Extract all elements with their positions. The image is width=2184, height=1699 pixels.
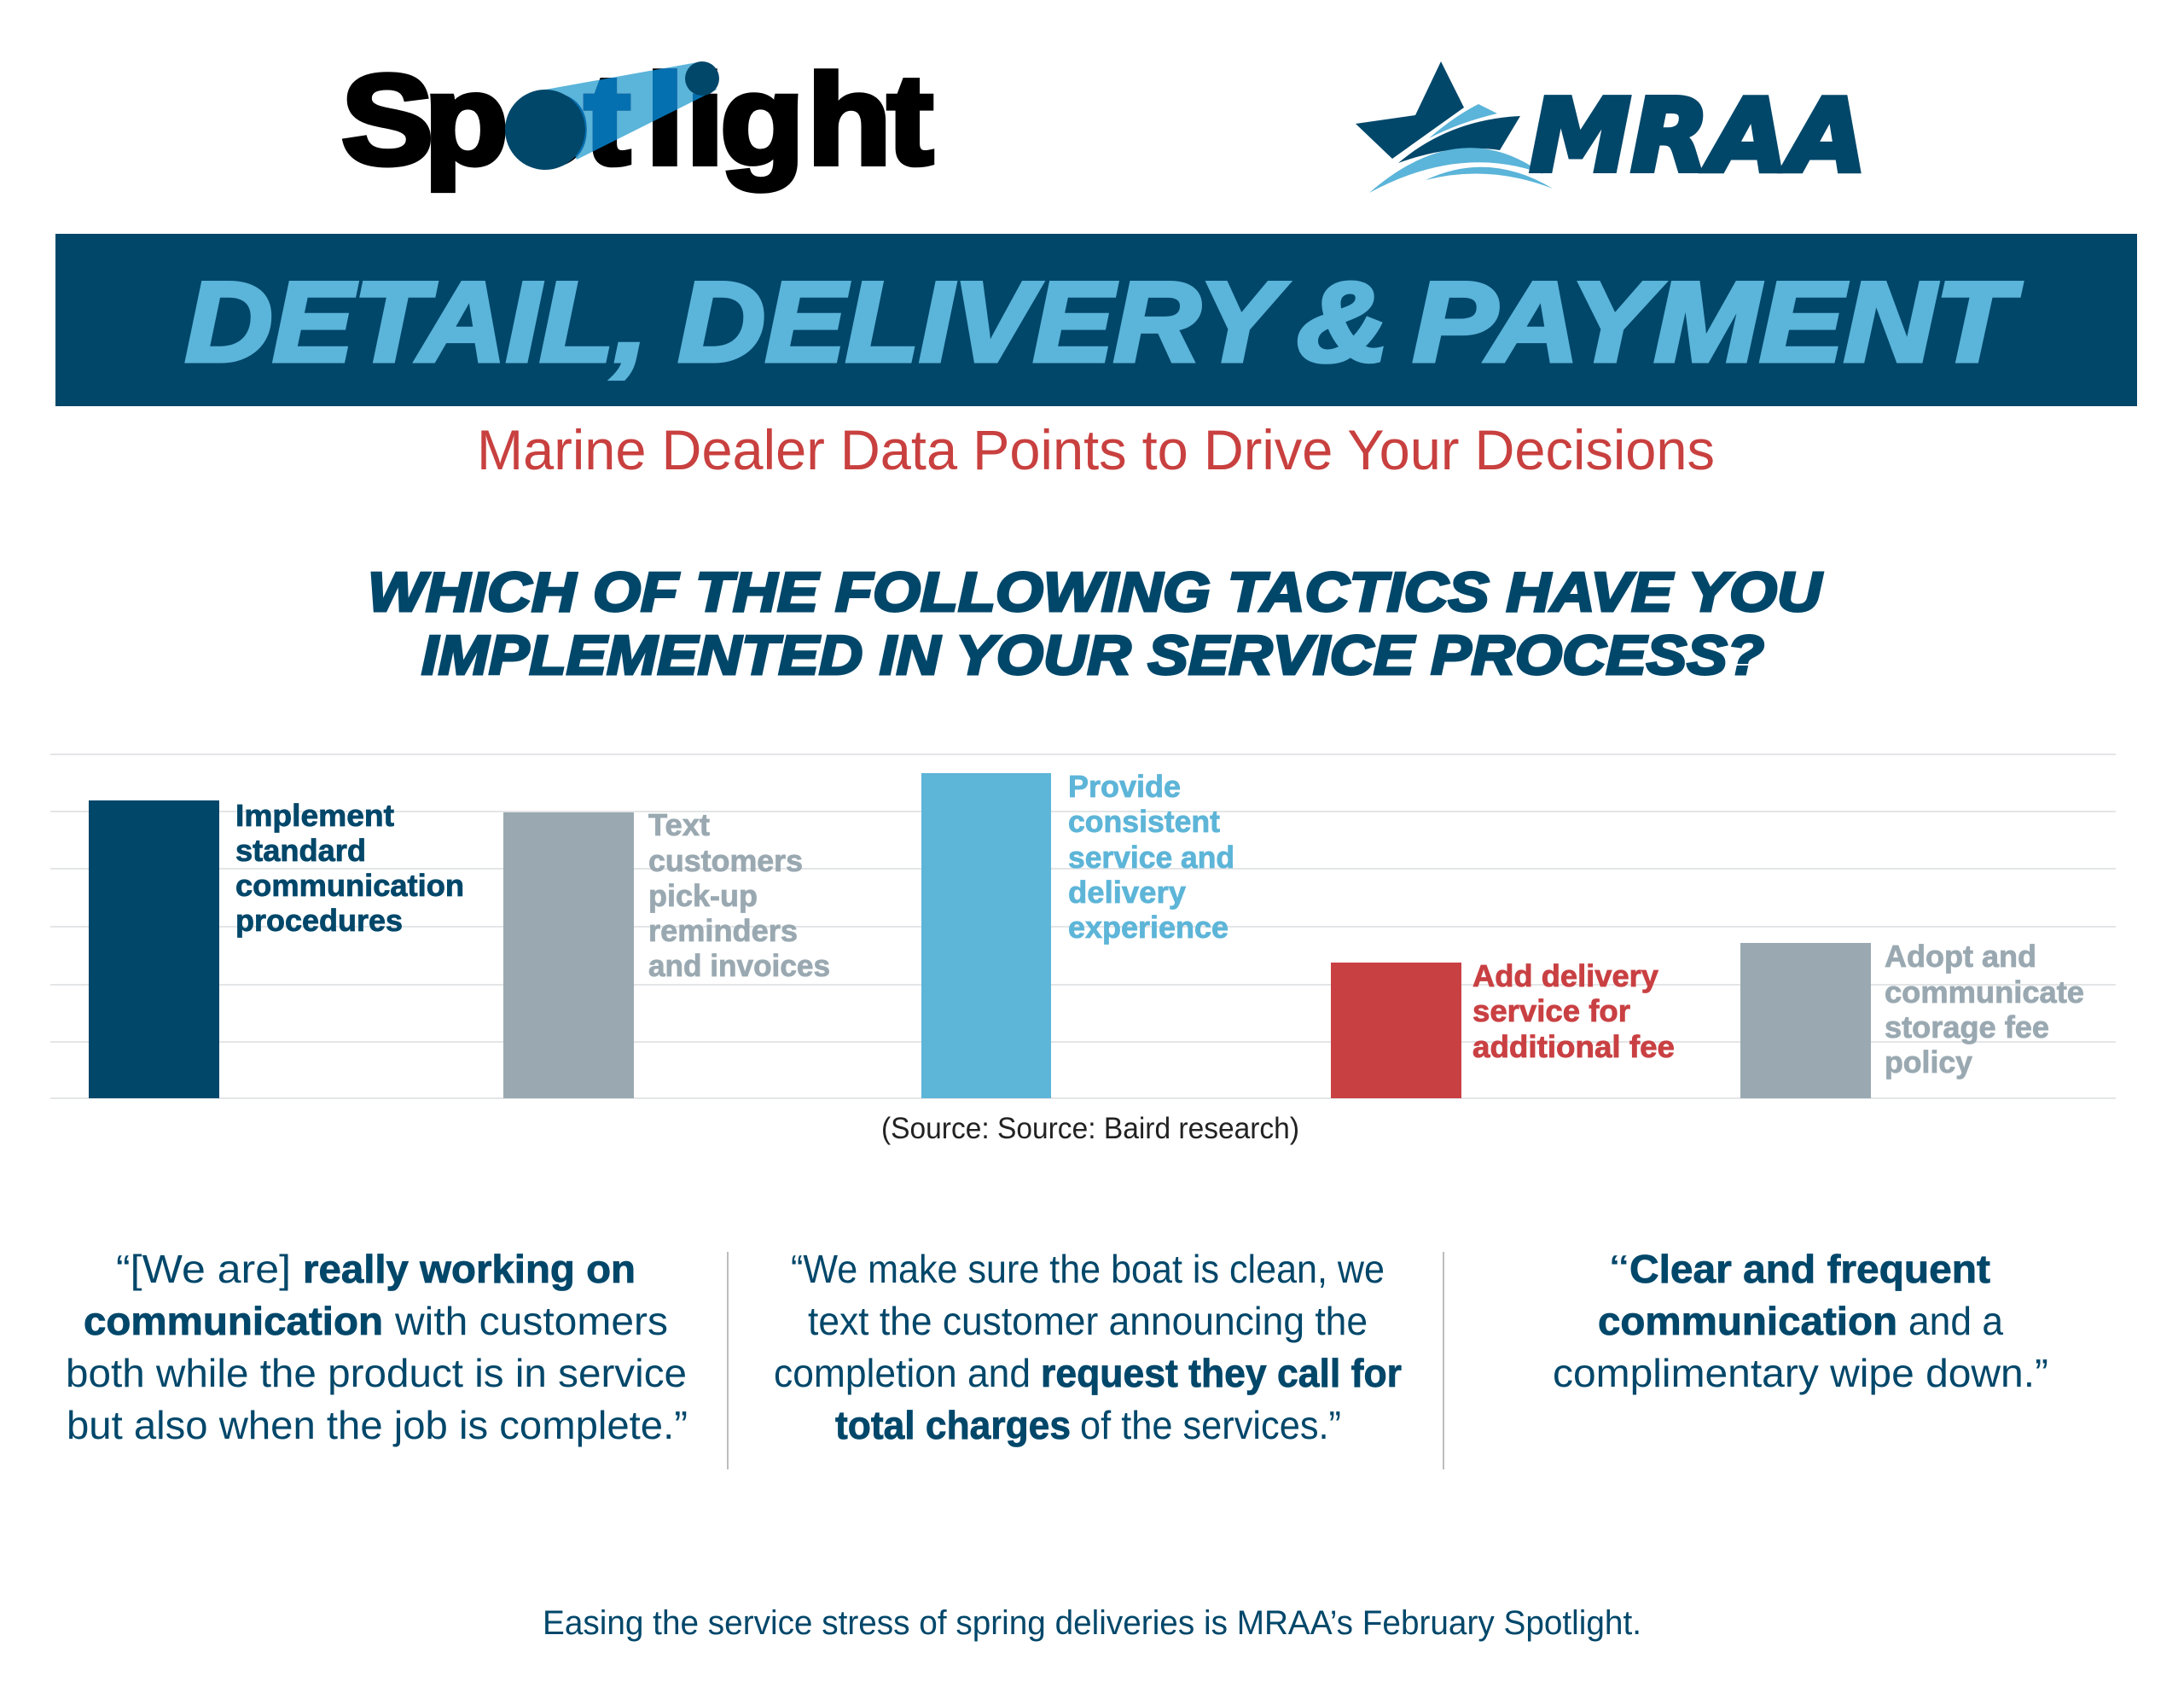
chart heading bbox=[368, 561, 1823, 686]
quote: left column: but also when the job is complete.” bbox=[67, 1403, 688, 1447]
label: delivery fee: additional fee bbox=[1472, 1029, 1675, 1064]
label: standard communication: procedures bbox=[235, 903, 403, 938]
quote: right column: and a bbox=[1908, 1299, 2003, 1343]
label: delivery fee: Add delivery bbox=[1472, 958, 1658, 993]
divider bbox=[727, 1252, 729, 1469]
quote: right column bbox=[1553, 1247, 2048, 1395]
label: consistent experience: Provide bbox=[1068, 769, 1181, 804]
label: standard communication bbox=[235, 798, 464, 938]
label: text customers bbox=[648, 807, 830, 983]
label: text customers: and invoices bbox=[648, 948, 830, 983]
logo: Spotlight: Spotlight bbox=[341, 49, 933, 192]
title banner: PAYMENT bbox=[1413, 259, 2022, 386]
title banner: & bbox=[1297, 259, 1389, 386]
quote: middle column: total charges bbox=[835, 1403, 1071, 1447]
title banner bbox=[55, 234, 2137, 406]
label: consistent experience: delivery bbox=[1068, 875, 1186, 910]
label: delivery fee bbox=[1472, 958, 1675, 1064]
quote: middle column bbox=[774, 1247, 1402, 1447]
logo: MRAA: MRAA bbox=[1530, 77, 1867, 195]
quote: left column: communication bbox=[84, 1299, 383, 1343]
quote: middle column: completion and bbox=[774, 1351, 1031, 1395]
bar chart bbox=[50, 754, 2116, 1098]
label: storage fee: Adopt and bbox=[1885, 939, 2036, 974]
label: storage fee: communicate bbox=[1885, 975, 2084, 1010]
label: standard communication: standard bbox=[235, 833, 366, 868]
bar: delivery fee bbox=[1331, 963, 1461, 1098]
chart heading: IMPLEMENTED IN YOUR SERVICE PROCESS? bbox=[421, 624, 1764, 686]
label: standard communication: communication bbox=[235, 868, 464, 903]
quote: right column: Clear and frequent bbox=[1629, 1247, 1990, 1291]
bar: text customers bbox=[503, 812, 634, 1098]
title banner: DELIVERY bbox=[678, 259, 1288, 386]
label: consistent experience: experience bbox=[1068, 910, 1228, 945]
title banner: DETAIL, bbox=[185, 259, 648, 386]
subtitle: Marine Dealer Data Points to Drive Your Decisions bbox=[477, 418, 1715, 481]
label: text customers: customers bbox=[648, 843, 803, 878]
bar: storage fee bbox=[1740, 943, 1871, 1098]
label: storage fee: policy bbox=[1885, 1044, 1972, 1079]
label: text customers: reminders bbox=[648, 913, 798, 948]
label: consistent experience bbox=[1068, 769, 1234, 945]
quote: middle column: text the customer announcing the bbox=[808, 1299, 1368, 1343]
quote: right column: complimentary wipe down.” bbox=[1553, 1351, 2048, 1395]
quote: left column bbox=[66, 1247, 688, 1447]
label: text customers: Text bbox=[648, 807, 710, 842]
quote: middle column: request they call for bbox=[1041, 1351, 1402, 1395]
label: consistent experience: consistent bbox=[1068, 804, 1220, 839]
quote: left column: both while the product is in service bbox=[66, 1351, 687, 1395]
label: storage fee: storage fee bbox=[1885, 1010, 2049, 1044]
quote: left column: with customers bbox=[394, 1299, 668, 1343]
bar: standard communication bbox=[89, 800, 219, 1098]
label: storage fee bbox=[1885, 939, 2084, 1079]
quote: middle column: “We make sure the boat is clean, we bbox=[791, 1247, 1385, 1291]
quote: right column: communication bbox=[1598, 1299, 1897, 1343]
source note: (Source: Source: Baird research) bbox=[881, 1112, 1299, 1145]
label: text customers: pick-up bbox=[648, 878, 758, 913]
label: standard communication: Implement bbox=[235, 798, 394, 833]
quote: left column: “[We are] bbox=[116, 1247, 291, 1291]
label: consistent experience: service and bbox=[1068, 840, 1234, 875]
logo: MRAA bbox=[1356, 61, 1867, 195]
footer note: Easing the service stress of spring deliveries is MRAA’s February Spotlight. bbox=[543, 1604, 1641, 1642]
divider bbox=[1443, 1252, 1444, 1469]
quote: right column: “ bbox=[1610, 1247, 1629, 1291]
label: delivery fee: service for bbox=[1472, 993, 1630, 1028]
bar: consistent experience bbox=[921, 773, 1051, 1098]
chart heading: WHICH OF THE FOLLOWING TACTICS HAVE YOU bbox=[368, 561, 1823, 623]
quote: left column: really working on bbox=[303, 1247, 636, 1291]
quote: middle column: of the services.” bbox=[1080, 1403, 1341, 1447]
